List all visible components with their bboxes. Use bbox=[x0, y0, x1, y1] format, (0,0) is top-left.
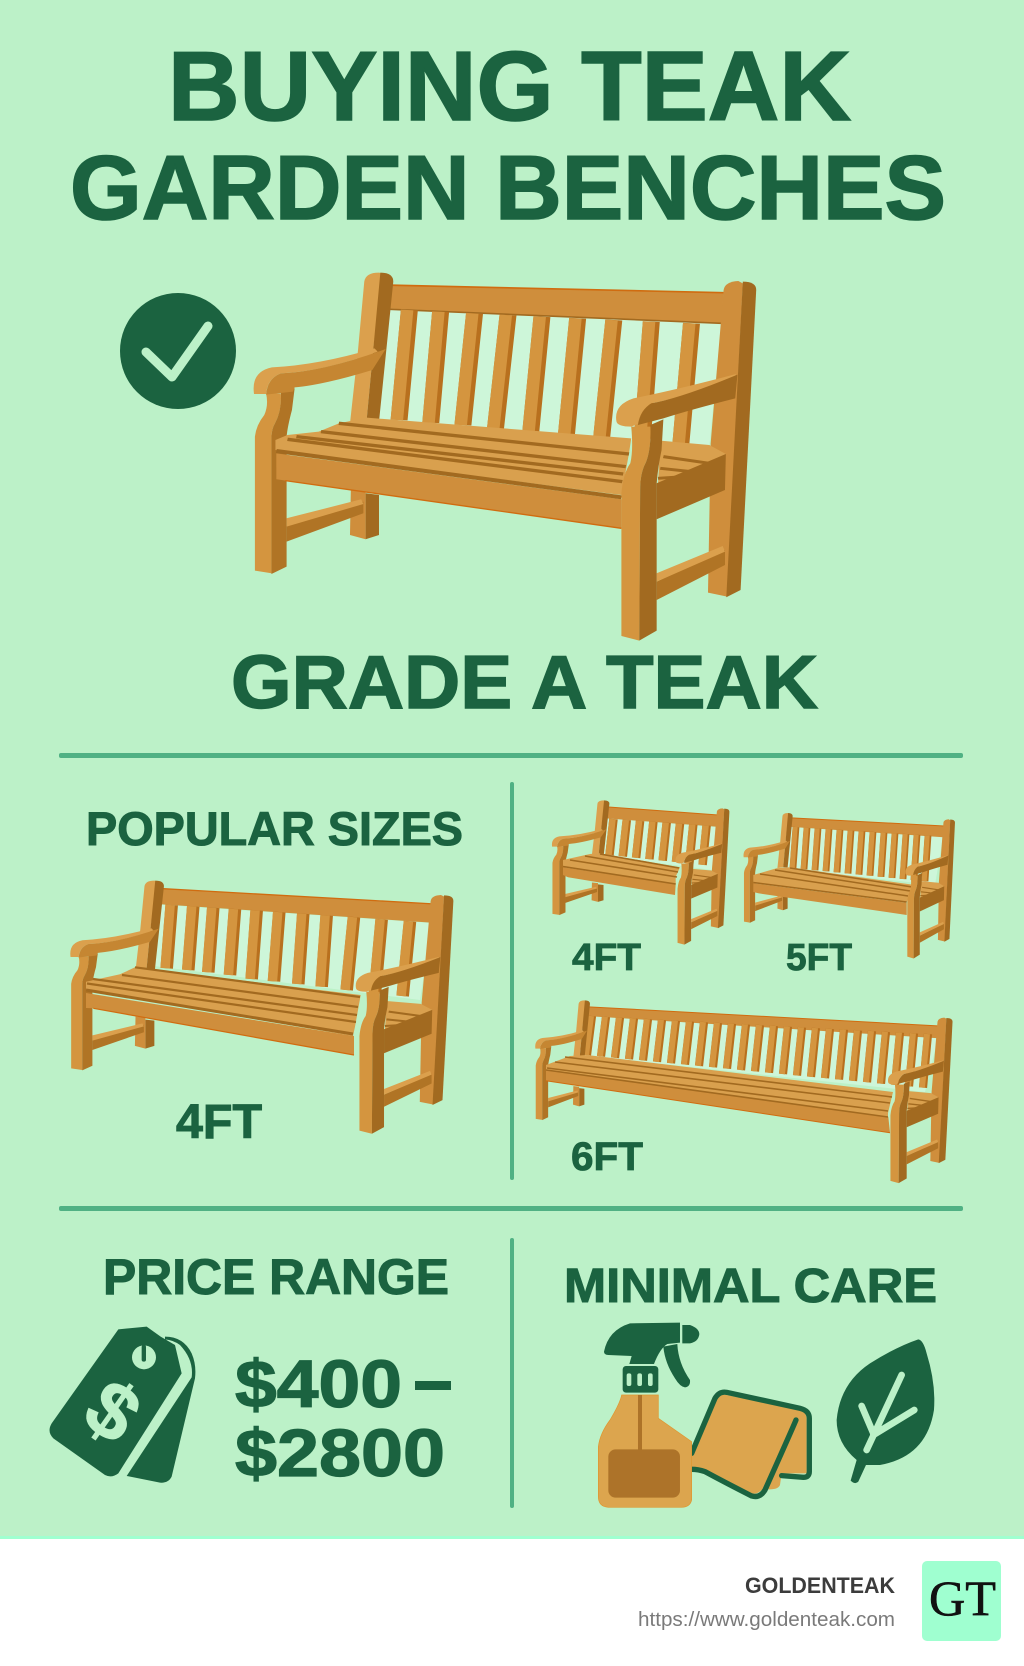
panel: price range bbox=[50, 1249, 451, 1491]
vertical divider bbox=[510, 1238, 514, 1508]
illustration: small 4ft bench bbox=[552, 800, 729, 945]
icon: check mark badge bbox=[120, 293, 236, 409]
title bbox=[70, 31, 946, 239]
heading: price range: PRICE RANGE bbox=[103, 1249, 449, 1305]
label: 5ft: 5FT bbox=[786, 937, 852, 979]
label: 4ft small: 4FT bbox=[572, 937, 641, 979]
footer bbox=[0, 1536, 1024, 1666]
logo: GT bbox=[929, 1570, 996, 1626]
icon: price tag: $ bbox=[69, 1362, 157, 1460]
vertical divider bbox=[510, 782, 514, 1180]
panel: minimal care bbox=[564, 1260, 937, 1507]
brand name: GOLDENTEAK bbox=[745, 1573, 895, 1598]
icon: price tag bbox=[50, 1327, 195, 1483]
heading: minimal care: MINIMAL CARE bbox=[564, 1260, 937, 1313]
price figures bbox=[235, 1347, 451, 1491]
heading: grade a teak: GRADE A TEAK bbox=[231, 640, 818, 724]
panel: popular sizes bbox=[70, 802, 463, 1149]
divider bbox=[59, 753, 963, 758]
label: 4ft large: 4FT bbox=[176, 1096, 262, 1149]
label: 6ft: 6FT bbox=[571, 1135, 643, 1179]
logo bbox=[922, 1561, 1001, 1641]
illustration: 6ft bench bbox=[535, 1000, 953, 1183]
divider bbox=[59, 1206, 963, 1211]
icon: leaf bbox=[837, 1339, 934, 1483]
price figures: $2800 bbox=[235, 1416, 445, 1491]
url: https://www.goldenteak.com bbox=[638, 1609, 895, 1631]
title: BUYING TEAK bbox=[168, 31, 851, 141]
illustration: main teak bench bbox=[254, 273, 756, 641]
title: GARDEN BENCHES bbox=[70, 138, 946, 239]
heading: popular sizes: POPULAR SIZES bbox=[86, 802, 463, 855]
icon: spray bottle and cloth bbox=[598, 1323, 809, 1507]
panel: size comparison bbox=[535, 800, 955, 1183]
illustration: 5ft bench bbox=[744, 813, 955, 958]
illustration: large 4ft bench bbox=[70, 881, 453, 1134]
price figures: $400 bbox=[235, 1347, 402, 1422]
